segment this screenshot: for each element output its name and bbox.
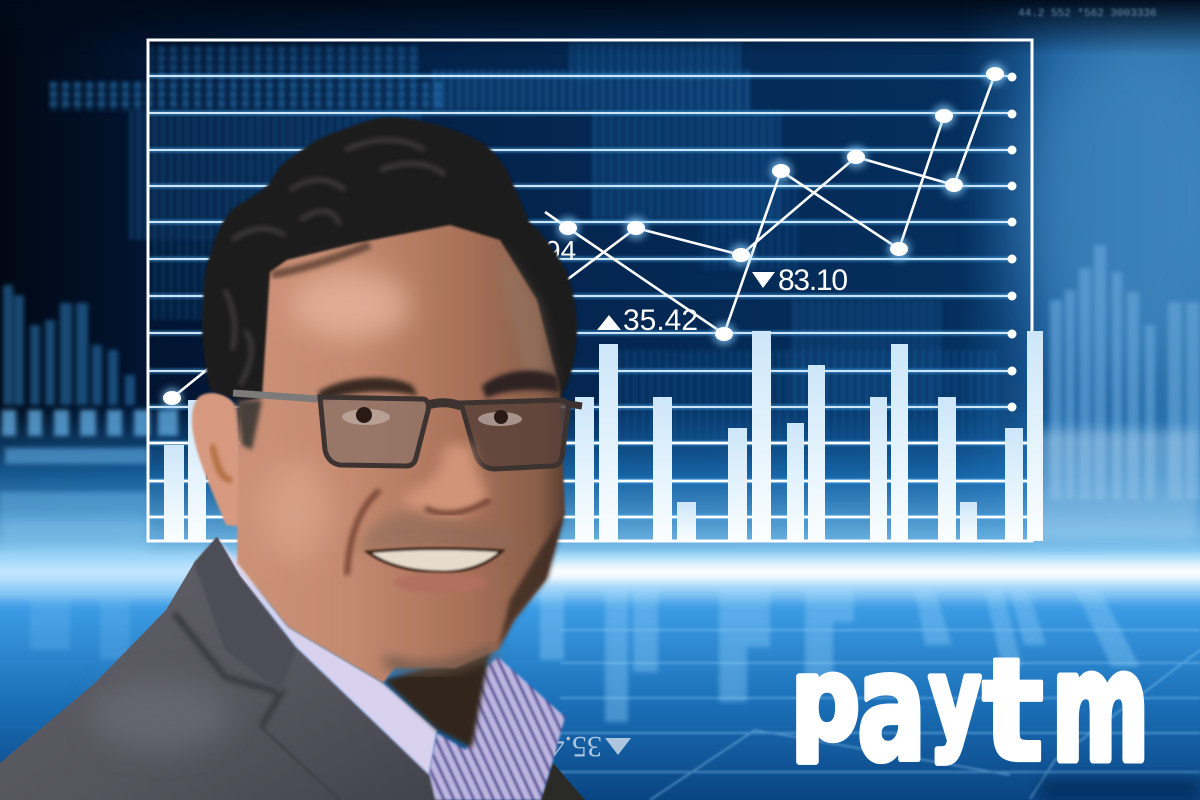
rising brightness towards horizon bbox=[0, 400, 1200, 565]
lower lip bbox=[394, 573, 486, 593]
reflected label: 35.42 bbox=[534, 730, 602, 763]
forehead right grey shade bbox=[500, 245, 558, 390]
neck shadow bbox=[383, 650, 490, 748]
value label: 83.10: 83.10 bbox=[778, 264, 848, 297]
face bbox=[237, 225, 565, 683]
sideburn bbox=[236, 400, 262, 450]
line chart markers bbox=[162, 63, 1006, 408]
dark bottom right corner bbox=[1040, 778, 1200, 800]
background left bars bbox=[3, 285, 135, 405]
portrait bbox=[0, 117, 585, 800]
smile folds bbox=[347, 490, 380, 575]
line chart bbox=[172, 74, 995, 398]
mouth bbox=[368, 549, 502, 572]
chart bbox=[148, 40, 1043, 541]
grid lines with end dots bbox=[148, 72, 1032, 517]
world map texture bbox=[45, 40, 1000, 440]
right jaw shadow bbox=[498, 513, 565, 650]
glasses bbox=[233, 393, 582, 469]
paytm logo: y bbox=[929, 634, 981, 764]
forehead highlight bbox=[290, 271, 410, 339]
jacket bbox=[0, 537, 447, 800]
background right bars bbox=[1050, 245, 1200, 500]
upper lip area bbox=[360, 513, 520, 552]
jacket shoulder highlight bbox=[90, 680, 230, 750]
value label: 35.42: 35.42 bbox=[623, 304, 698, 337]
shirt collar bbox=[219, 537, 437, 775]
floor with reflections bbox=[0, 553, 1200, 800]
hairline wisps bbox=[272, 245, 370, 275]
cheek highlight bbox=[259, 460, 331, 560]
chin shadow bbox=[385, 650, 495, 668]
chart frame bbox=[148, 40, 1032, 541]
right ticker text: 44.2 552 *562 3003336 bbox=[1018, 8, 1157, 20]
hair texture bbox=[225, 140, 445, 385]
background left squares bbox=[0, 410, 178, 532]
paytm logo: t bbox=[982, 628, 1044, 795]
paytm logo: a bbox=[857, 621, 927, 795]
paytm logo: p bbox=[791, 634, 860, 765]
bar chart bbox=[164, 331, 1043, 541]
jacket lapel crease bbox=[174, 613, 281, 727]
shirt stripes bbox=[429, 657, 565, 800]
value label: partial: 94 bbox=[545, 235, 576, 266]
paytm logo: m bbox=[1052, 621, 1149, 795]
reflected label bbox=[534, 730, 631, 763]
hair bbox=[202, 117, 577, 400]
paytm logo bbox=[791, 621, 1149, 795]
bright horizon band bbox=[0, 553, 1200, 599]
eyebrows bbox=[318, 378, 418, 402]
jacket right edge bbox=[541, 763, 585, 800]
nose bbox=[402, 445, 490, 517]
eyes bbox=[342, 407, 522, 426]
lapel seam bbox=[261, 727, 340, 800]
ear bbox=[192, 393, 244, 527]
